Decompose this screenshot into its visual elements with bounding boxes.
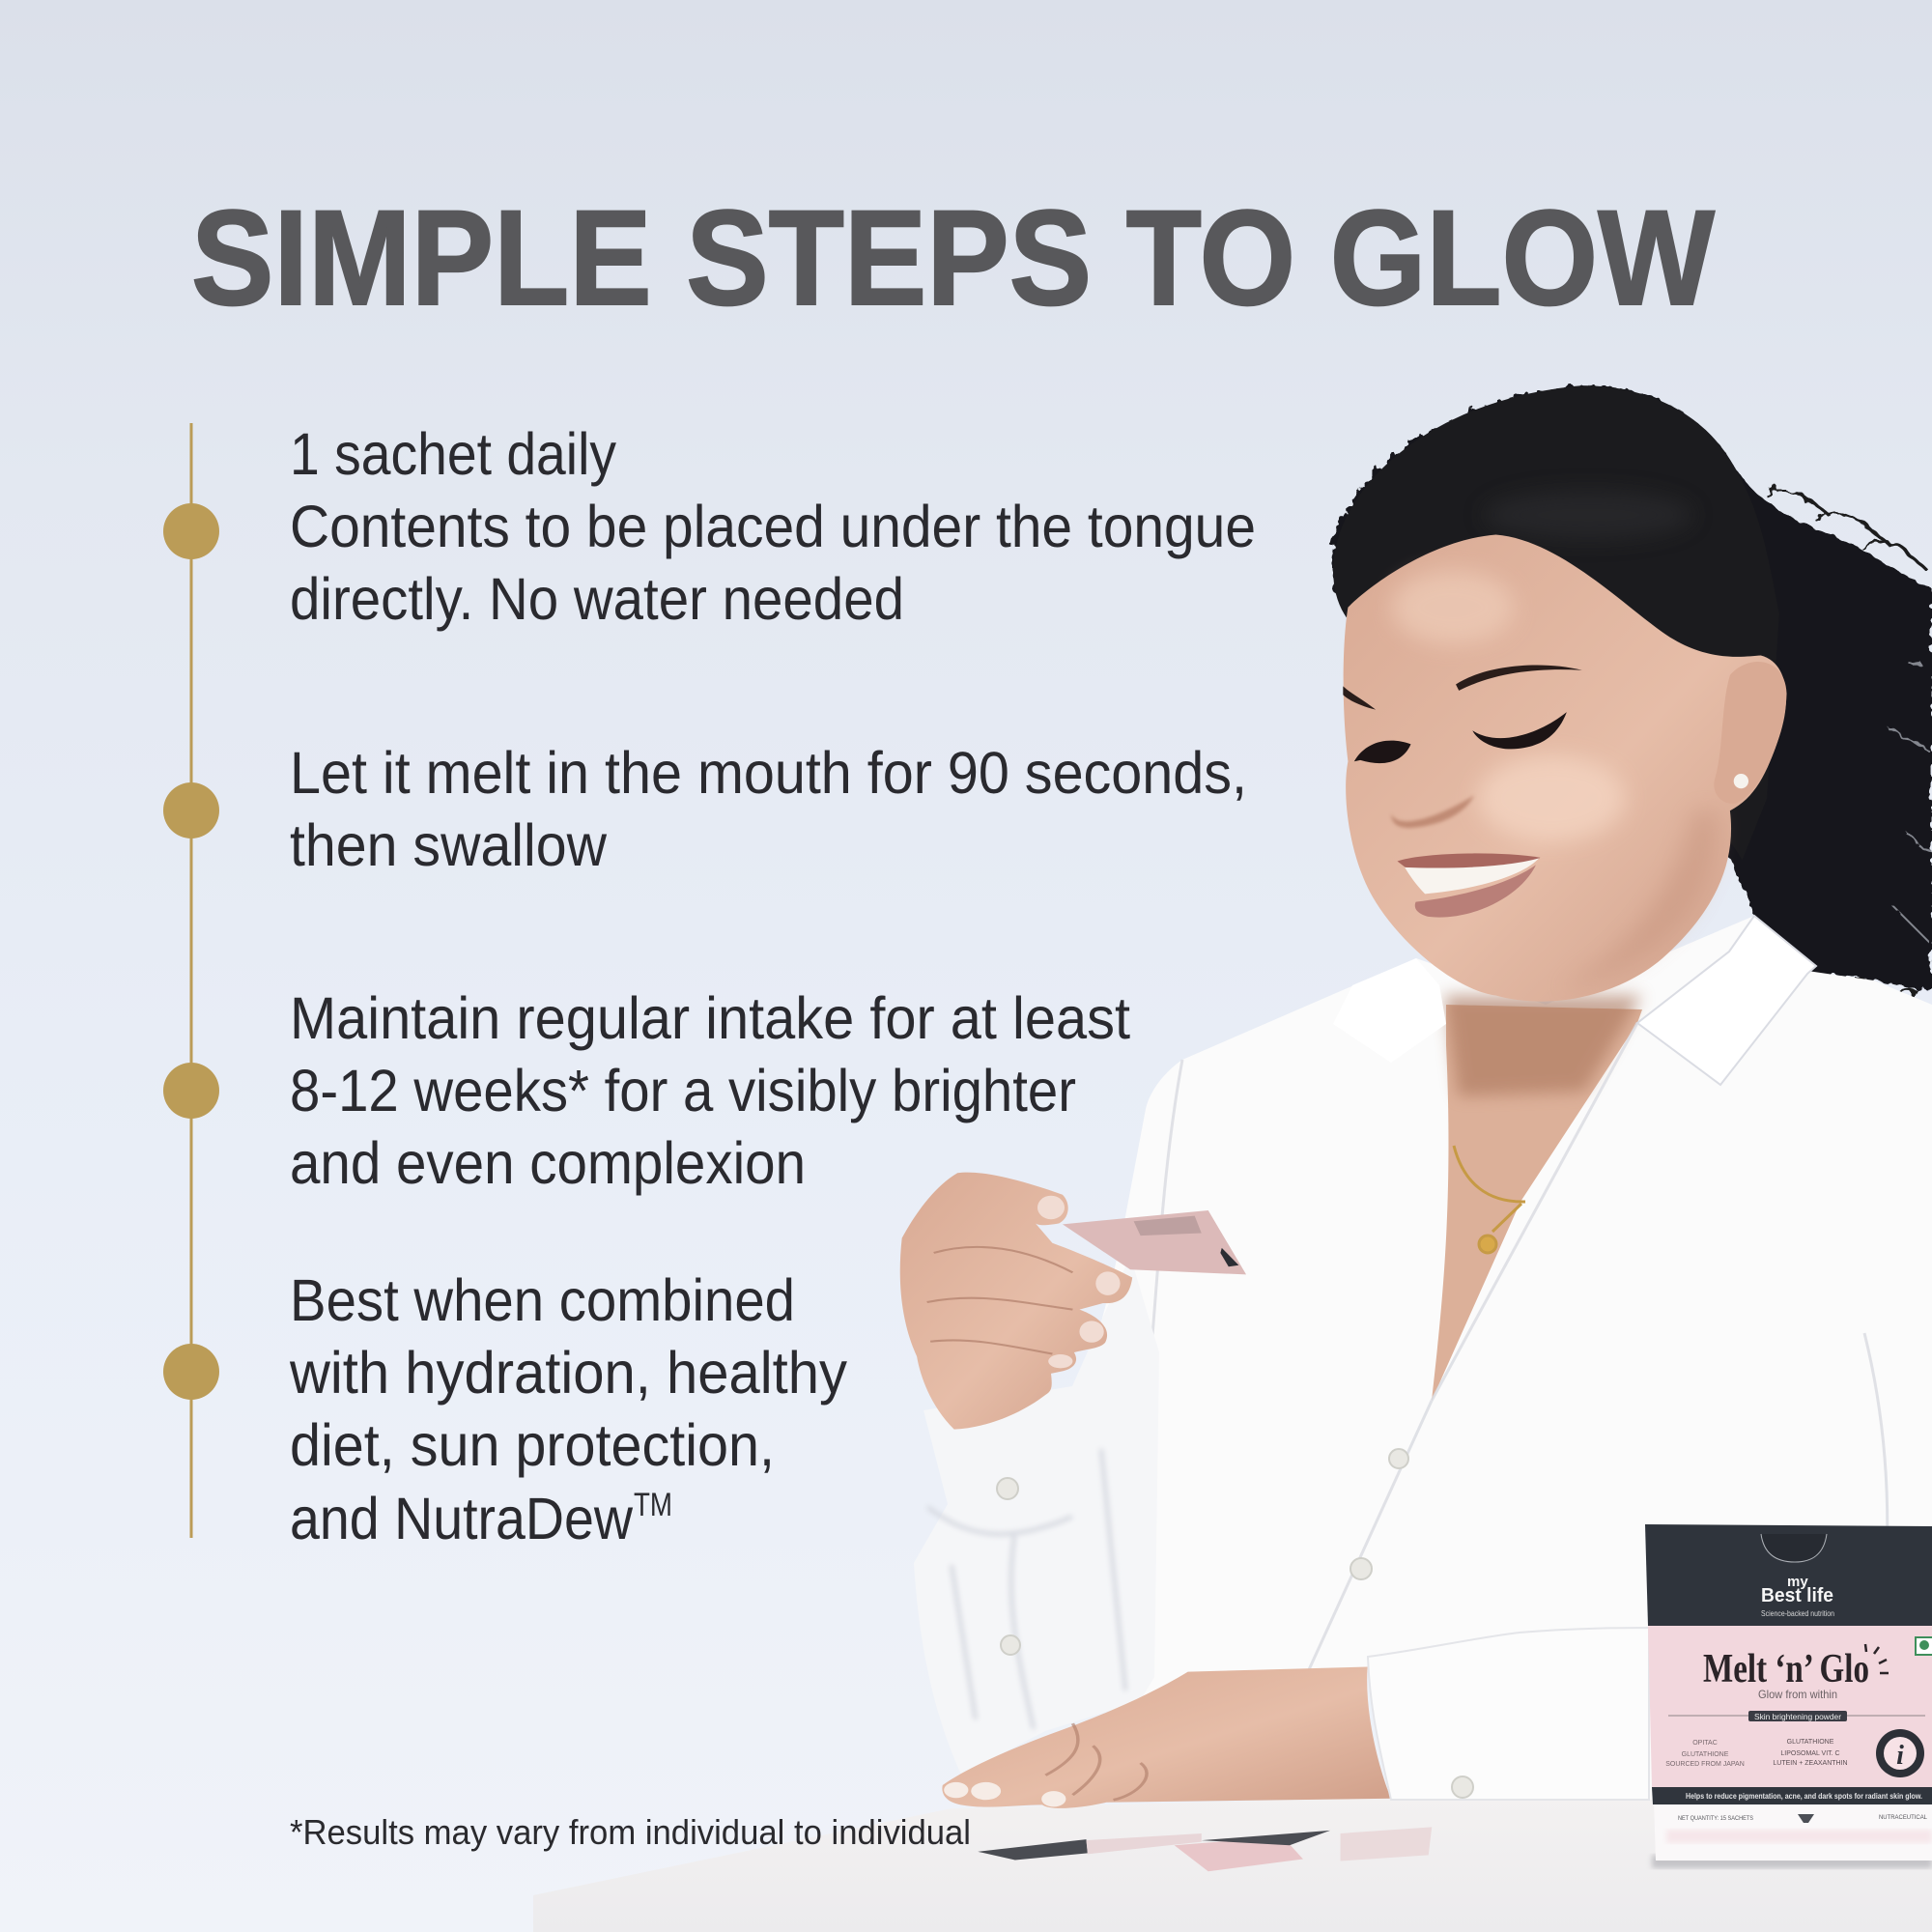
brand: my xyxy=(1787,1574,1808,1590)
badge xyxy=(1876,1729,1924,1777)
eyebrows xyxy=(1343,666,1582,710)
ingredient left: GLUTATHIONE xyxy=(1682,1751,1729,1758)
box footer: NET QUANTITY: 15 SACHETS xyxy=(1678,1816,1753,1822)
face xyxy=(1343,534,1787,1002)
veg mark xyxy=(1916,1637,1932,1655)
step 3 text: Maintain regular intake for at least xyxy=(290,985,1130,1051)
step marker 2 xyxy=(163,782,219,838)
badge: i xyxy=(1896,1741,1904,1771)
woman photo illustration xyxy=(900,385,1932,1871)
jaw shade xyxy=(1557,810,1719,989)
eyes xyxy=(1354,712,1567,763)
collar xyxy=(1333,916,1816,1085)
step 3 text: and even complexion xyxy=(290,1130,806,1196)
cheek highlight xyxy=(1477,755,1625,841)
step 1 text: 1 sachet daily xyxy=(290,421,616,487)
sleeve holding sachet xyxy=(914,1256,1159,1775)
product name: Melt ‘n’ Glo xyxy=(1703,1647,1869,1691)
title: SIMPLE STEPS TO GLOW xyxy=(191,182,1715,333)
step 2 text: Let it melt in the mouth for 90 seconds, xyxy=(290,740,1247,806)
product box: Skin brightening powder xyxy=(1754,1713,1841,1721)
finger nails xyxy=(1037,1196,1121,1368)
lips xyxy=(1397,853,1540,875)
cuff button xyxy=(1452,1776,1473,1798)
sachets on table xyxy=(978,1827,1432,1871)
step 1 text: directly. No water needed xyxy=(290,566,904,632)
ingredient left: OPITAC xyxy=(1692,1740,1718,1747)
glow rays xyxy=(1865,1644,1889,1673)
footnote: *Results may vary from individual to individual xyxy=(290,1812,971,1852)
shirt body xyxy=(1063,916,1932,1800)
ingredient right: LUTEIN + ZEAXANTHIN xyxy=(1773,1760,1848,1767)
box pink band xyxy=(1648,1626,1932,1787)
curly hair wisps xyxy=(1767,493,1927,996)
product box xyxy=(1645,1524,1932,1868)
step 3 text: 8-12 weeks* for a visibly brighter xyxy=(290,1058,1076,1123)
step 4 text xyxy=(289,1267,847,1551)
product box: Science-backed nutrition xyxy=(1761,1609,1834,1618)
neck and chest xyxy=(1432,1005,1642,1401)
sleeve folds xyxy=(927,1449,1125,1729)
step 2 text xyxy=(290,740,1247,878)
right sleeve cuff xyxy=(1368,1628,1649,1800)
teeth xyxy=(1405,858,1539,894)
step 2 text: then swallow xyxy=(290,812,608,878)
ingredient left: SOURCED FROM JAPAN xyxy=(1665,1761,1745,1768)
hair back xyxy=(1330,385,1932,996)
step 4 text: Best when combined xyxy=(290,1267,795,1333)
step marker 4 xyxy=(163,1344,219,1400)
ear xyxy=(1714,662,1787,804)
flap notch xyxy=(1761,1534,1827,1562)
ingredient left xyxy=(1665,1740,1745,1768)
ingredient right: GLUTATHIONE xyxy=(1787,1739,1834,1746)
pink decorative band xyxy=(1666,1830,1932,1843)
step marker 3 xyxy=(163,1063,219,1119)
step marker 1 xyxy=(163,503,219,559)
step 4 text: diet, sun protection, xyxy=(290,1412,775,1478)
step 1 text: Contents to be placed under the tongue xyxy=(290,494,1256,559)
divider line xyxy=(1668,1715,1925,1717)
box footer: NUTRACEUTICAL xyxy=(1879,1815,1928,1821)
step 3 text xyxy=(290,985,1130,1196)
hand on table xyxy=(942,1667,1391,1808)
timeline xyxy=(163,423,219,1538)
step 4 text: with hydration, healthy xyxy=(289,1340,847,1406)
forehead highlight xyxy=(1391,570,1515,644)
step 4 text: and NutraDew xyxy=(290,1486,634,1551)
nose xyxy=(1391,795,1474,828)
box shadow xyxy=(1652,1855,1932,1868)
ingredient right xyxy=(1773,1739,1848,1767)
box body xyxy=(1645,1524,1932,1861)
product box: Best life xyxy=(1761,1585,1833,1606)
table xyxy=(533,1799,1932,1932)
nails xyxy=(944,1782,1065,1806)
shirt folds xyxy=(1150,1023,1888,1676)
hand holding sachet xyxy=(900,1173,1246,1430)
step 4 text: TM xyxy=(634,1487,672,1523)
pearl earring xyxy=(1734,774,1748,788)
sachet xyxy=(1063,1210,1246,1274)
box top band xyxy=(1645,1524,1932,1626)
finger creases xyxy=(927,1247,1072,1354)
box dark strip xyxy=(1652,1787,1932,1804)
powder pill xyxy=(1748,1711,1847,1721)
necklace xyxy=(1454,1146,1525,1253)
ingredient right: LIPOSOMAL VIT. C xyxy=(1780,1750,1840,1757)
hair gaps xyxy=(1890,657,1930,940)
buttons xyxy=(997,1449,1408,1655)
tagline: Glow from within xyxy=(1758,1688,1837,1701)
box footer xyxy=(1678,1815,1928,1822)
footer emblem xyxy=(1798,1814,1814,1823)
step 1 text xyxy=(290,421,1256,632)
